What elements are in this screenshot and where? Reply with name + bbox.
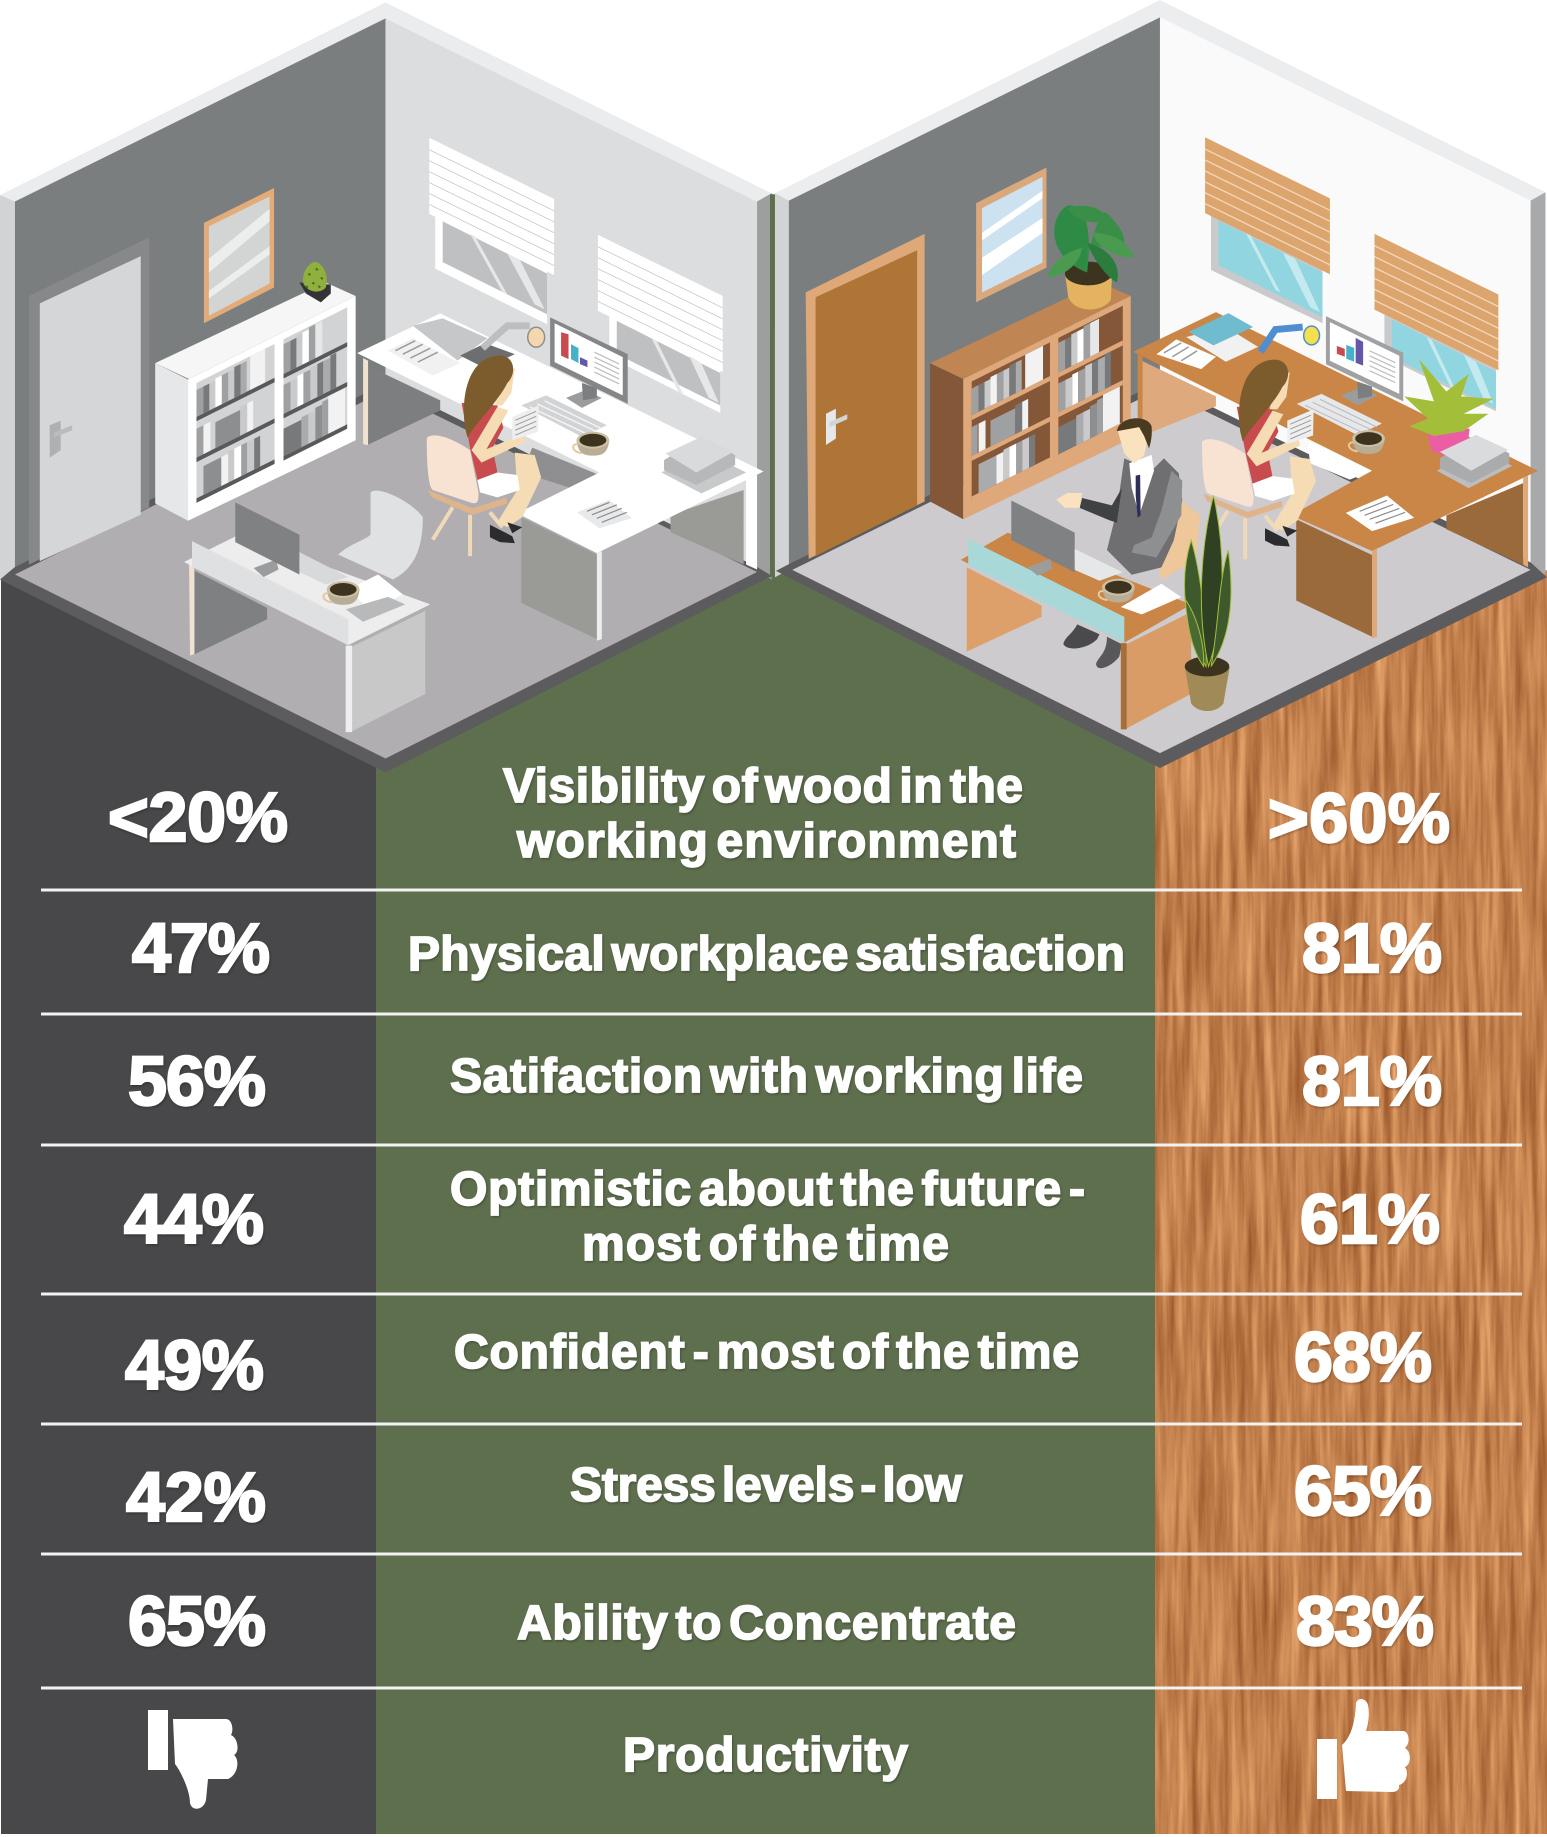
- coffee cup on front desk: [1099, 579, 1135, 603]
- right column values: 61%: [1300, 1180, 1440, 1258]
- centre column labels: Physical workplace satisfaction: [408, 928, 1125, 981]
- centre column labels: most of the time: [582, 1218, 949, 1271]
- centre column labels: Stress levels - low: [570, 1459, 963, 1512]
- L-shaped white desk: [357, 313, 764, 641]
- left column values: [108, 778, 288, 1660]
- stack of books: [1437, 435, 1512, 488]
- front wooden desk with teal partition: [961, 500, 1191, 729]
- L-shaped wooden desk: [1133, 312, 1538, 638]
- snake plant in pot: [1185, 496, 1231, 711]
- room walls and floor: [0, 2, 780, 772]
- left column values: 42%: [126, 1458, 266, 1536]
- window two with wood blind: [1375, 234, 1498, 411]
- wall picture: [204, 188, 274, 323]
- wooden door: [806, 234, 925, 559]
- centre column labels: Optimistic about the future -: [450, 1163, 1085, 1216]
- right column values: 68%: [1294, 1318, 1432, 1396]
- centre column labels: [408, 760, 1125, 1782]
- paper on L desk: [1346, 496, 1414, 531]
- small cactus on shelf: [299, 262, 331, 302]
- centre column labels: Ability to Concentrate: [517, 1597, 1016, 1650]
- centre column labels: Satifaction with working life: [450, 1050, 1083, 1103]
- centre column labels: working environment: [516, 815, 1016, 868]
- panel: background centre column (green): [376, 565, 1155, 1834]
- right column values: 81%: [1302, 1042, 1442, 1120]
- right column values: 65%: [1294, 1452, 1432, 1530]
- front white desk with monitor: [184, 502, 430, 732]
- wooden bookshelf: [930, 282, 1131, 519]
- left column values: 47%: [132, 909, 270, 987]
- stack of papers: [662, 437, 746, 493]
- window two with white blind: [598, 235, 723, 413]
- room walls and floor: [770, 0, 1547, 768]
- desk items: papers, teal book and lamp: [1156, 313, 1320, 369]
- bookshelf: [155, 283, 356, 521]
- centre column labels: Confident - most of the time: [454, 1326, 1079, 1379]
- icon: thumbs down: [148, 1710, 238, 1809]
- paper on L desk: [577, 500, 632, 528]
- coffee cup on L desk: [573, 432, 609, 456]
- illustration: plain grey office room: [0, 2, 780, 772]
- monitor with bar chart: [550, 317, 628, 408]
- left column values: <20%: [108, 778, 288, 856]
- seated man in grey suit: [1056, 418, 1200, 668]
- wall picture: [976, 167, 1046, 302]
- door: [29, 237, 149, 565]
- right column values: >60%: [1268, 779, 1450, 857]
- desk items: papers and lamp: [388, 318, 545, 376]
- coffee cup on L desk: [1349, 430, 1385, 454]
- right column values: 81%: [1302, 909, 1442, 987]
- empty grey chair: [338, 491, 423, 579]
- seated woman on chair: [1202, 360, 1316, 559]
- coffee cup on front desk: [323, 581, 360, 605]
- icon: thumbs up: [1317, 1699, 1410, 1799]
- panel: background right column (wood texture): [1155, 560, 1547, 1834]
- keyboard: [1297, 394, 1382, 435]
- left column values: 56%: [128, 1042, 266, 1120]
- divider lines between rows: [41, 888, 1522, 1690]
- left column values: 44%: [124, 1180, 264, 1258]
- panel: background left column (dark): [1, 575, 376, 1834]
- window one with white blind: [429, 138, 554, 324]
- centre column labels: Productivity: [623, 1729, 908, 1782]
- seated woman on chair: [427, 356, 541, 556]
- left column values: 49%: [125, 1326, 264, 1404]
- right column values: [1268, 779, 1450, 1660]
- potted plant on shelf: [1048, 205, 1134, 310]
- illustration: wooden green office room: [770, 0, 1547, 768]
- centre column labels: Visibility of wood in the: [503, 760, 1023, 813]
- keyboard: [521, 395, 607, 437]
- left column values: 65%: [128, 1582, 266, 1660]
- monitor with bar chart: [1326, 316, 1403, 405]
- right column values: 83%: [1296, 1582, 1434, 1660]
- pink pot plant on desk: [1404, 359, 1493, 457]
- window one with wood blind: [1205, 137, 1330, 323]
